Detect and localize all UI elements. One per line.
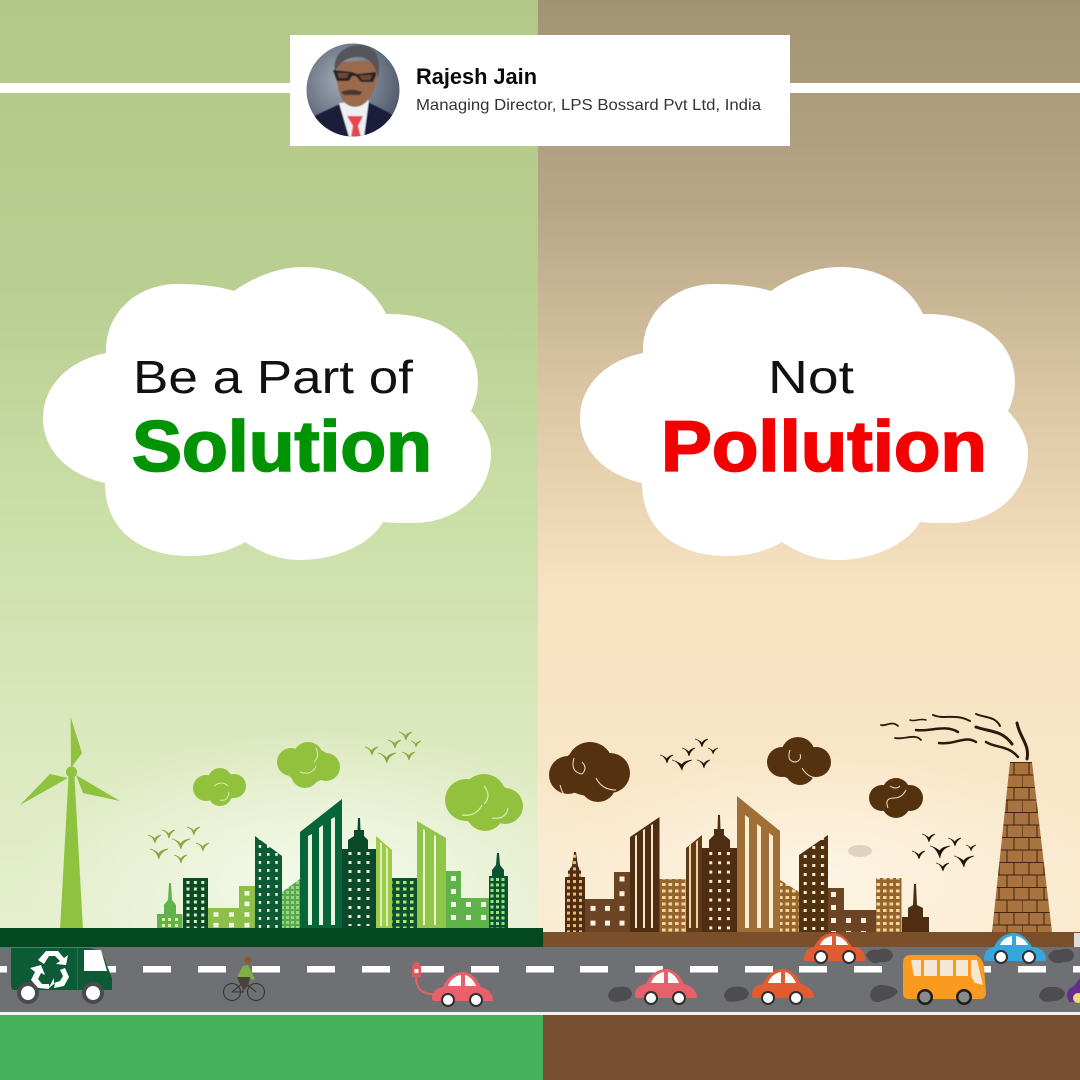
brown skyline	[565, 796, 929, 932]
right horizon glow	[520, 750, 1080, 1010]
headline not: Not	[768, 351, 854, 403]
green city scene	[0, 717, 543, 947]
faded smudge	[848, 845, 872, 857]
brown smog clouds	[549, 737, 923, 818]
purple car at edge with exhaust	[1039, 978, 1080, 1003]
lane markings	[0, 966, 1080, 972]
pink car with exhaust	[608, 969, 697, 1005]
green foreground	[0, 1015, 543, 1080]
road	[0, 947, 1080, 1015]
header rule right	[790, 83, 1080, 93]
dark green ground band	[0, 928, 543, 947]
green sky background	[0, 0, 540, 947]
headline line one: Be a Part of	[133, 351, 413, 403]
left horizon glow	[20, 730, 620, 1030]
road edge line	[0, 1012, 1080, 1015]
orange bus with exhaust	[870, 955, 986, 1005]
brown foreground	[543, 1015, 1080, 1080]
icon: brick chimney	[992, 762, 1052, 932]
smog cloud two	[767, 737, 831, 785]
icon: recycling truck	[11, 948, 112, 1004]
red car upper with exhaust	[804, 933, 893, 964]
cloud three	[445, 774, 523, 831]
green skyline	[157, 799, 508, 928]
right thought cloud with headline	[580, 267, 1028, 560]
cloud two	[277, 742, 340, 788]
chimney smoke	[881, 714, 1028, 759]
smog cloud three	[869, 778, 923, 818]
author card	[290, 35, 790, 146]
icon: wind turbine	[20, 717, 120, 930]
brown ground band	[543, 932, 1080, 947]
polluted city scene	[543, 714, 1080, 947]
left cloud shape	[43, 267, 491, 560]
icon: cyclist	[224, 956, 264, 1000]
green clouds	[193, 742, 523, 831]
asphalt	[0, 947, 1080, 1012]
author portrait	[306, 43, 400, 137]
traffic with exhaust	[608, 933, 1080, 1005]
polluted sky background	[538, 0, 1080, 947]
icon: electric car with plug	[412, 962, 493, 1007]
recycle symbol	[30, 951, 69, 989]
blue car with exhaust	[984, 933, 1074, 964]
header rule left	[0, 83, 290, 93]
cloud one	[193, 768, 246, 806]
dark birds lower flock	[912, 834, 976, 871]
author name: Rajesh Jain	[416, 64, 537, 89]
green birds lower flock	[148, 827, 209, 863]
orange car with exhaust	[724, 969, 814, 1005]
green birds upper flock	[365, 732, 421, 763]
partial vehicle at edge	[1074, 933, 1080, 947]
left thought cloud with headline	[43, 267, 491, 560]
smog cloud one	[549, 742, 630, 802]
author role: Managing Director, LPS Bossard Pvt Ltd, India	[416, 97, 761, 114]
headline pollution: Pollution	[661, 408, 987, 487]
right cloud shape	[580, 267, 1028, 560]
headline solution: Solution	[132, 408, 432, 487]
dark birds upper flock	[660, 739, 718, 770]
